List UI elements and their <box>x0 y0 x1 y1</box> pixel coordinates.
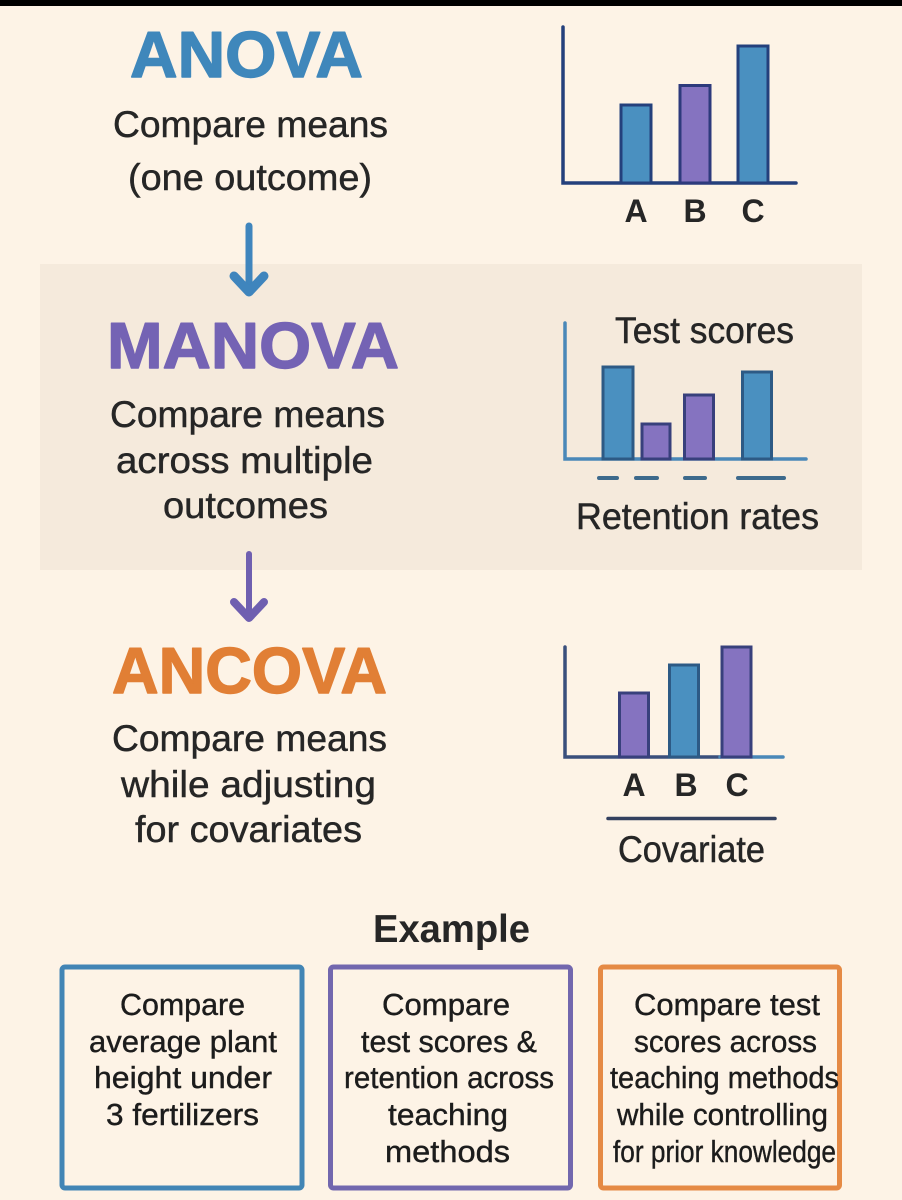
text: ANCOVA description: for covariates <box>135 809 362 850</box>
card: MANOVA example: retention across <box>344 1060 554 1095</box>
card: ANCOVA example <box>600 967 840 1188</box>
title: ANOVA: ANOVA <box>130 18 363 91</box>
card: MANOVA example: methods <box>385 1134 510 1169</box>
card: ANOVA example <box>62 967 302 1188</box>
text: ANCOVA description: Compare means <box>112 718 387 759</box>
chart: ANCOVA bars: A <box>622 767 646 803</box>
chart: MANOVA bars: Retention rates <box>576 496 819 537</box>
card: ANCOVA example: scores across <box>634 1024 817 1059</box>
card: MANOVA example <box>330 967 570 1188</box>
title: MANOVA: MANOVA <box>107 309 399 382</box>
card: ANOVA example: average plant <box>89 1024 277 1059</box>
card: ANOVA example: 3 fertilizers <box>106 1097 259 1132</box>
arrow: MANOVA to ANCOVA <box>234 554 264 618</box>
text: ANOVA description: Compare means <box>113 104 388 145</box>
chart: ANOVA bars: A <box>624 193 648 229</box>
chart: MANOVA bars <box>565 310 819 537</box>
panel: MANOVA band <box>40 264 862 570</box>
chart: MANOVA bars: Test scores <box>615 310 794 351</box>
chart: ANCOVA bars <box>565 647 783 870</box>
text: ANOVA description <box>113 104 388 198</box>
chart: ANCOVA bars: Covariate <box>618 829 765 870</box>
text: MANOVA description: Compare means <box>110 394 385 435</box>
text: ANOVA description: (one outcome) <box>128 157 372 198</box>
chart: ANOVA bars <box>563 27 796 229</box>
card: MANOVA example: test scores & <box>361 1024 537 1059</box>
chart: ANOVA bars: B <box>683 193 707 229</box>
text: ANCOVA description: while adjusting <box>120 764 376 805</box>
card: MANOVA example: Compare <box>382 987 510 1022</box>
text: MANOVA description: across multiple <box>116 440 373 481</box>
text: MANOVA description <box>110 394 385 526</box>
card: ANOVA example: Compare <box>120 987 245 1022</box>
section: MANOVA heading and description <box>107 309 399 526</box>
heading: Example: Example <box>373 908 530 951</box>
section: ANOVA heading and description <box>113 18 388 198</box>
card: ANCOVA example: while controlling <box>616 1097 828 1132</box>
card: MANOVA example: teaching <box>388 1097 508 1132</box>
card: ANCOVA example: teaching methods <box>610 1060 839 1095</box>
chart: ANCOVA bars: C <box>725 767 749 803</box>
section: ANCOVA heading and description <box>112 634 387 850</box>
text: ANCOVA description <box>112 718 387 850</box>
chart: ANCOVA bars: B <box>674 767 698 803</box>
card: ANOVA example: height under <box>94 1060 272 1095</box>
card: ANCOVA example: for prior knowledge <box>613 1134 836 1169</box>
card: ANCOVA example: Compare test <box>634 987 820 1022</box>
text: MANOVA description: outcomes <box>163 485 328 526</box>
arrow: ANOVA to MANOVA <box>234 226 264 292</box>
chart: ANOVA bars: C <box>741 193 765 229</box>
title: ANCOVA: ANCOVA <box>112 634 387 707</box>
